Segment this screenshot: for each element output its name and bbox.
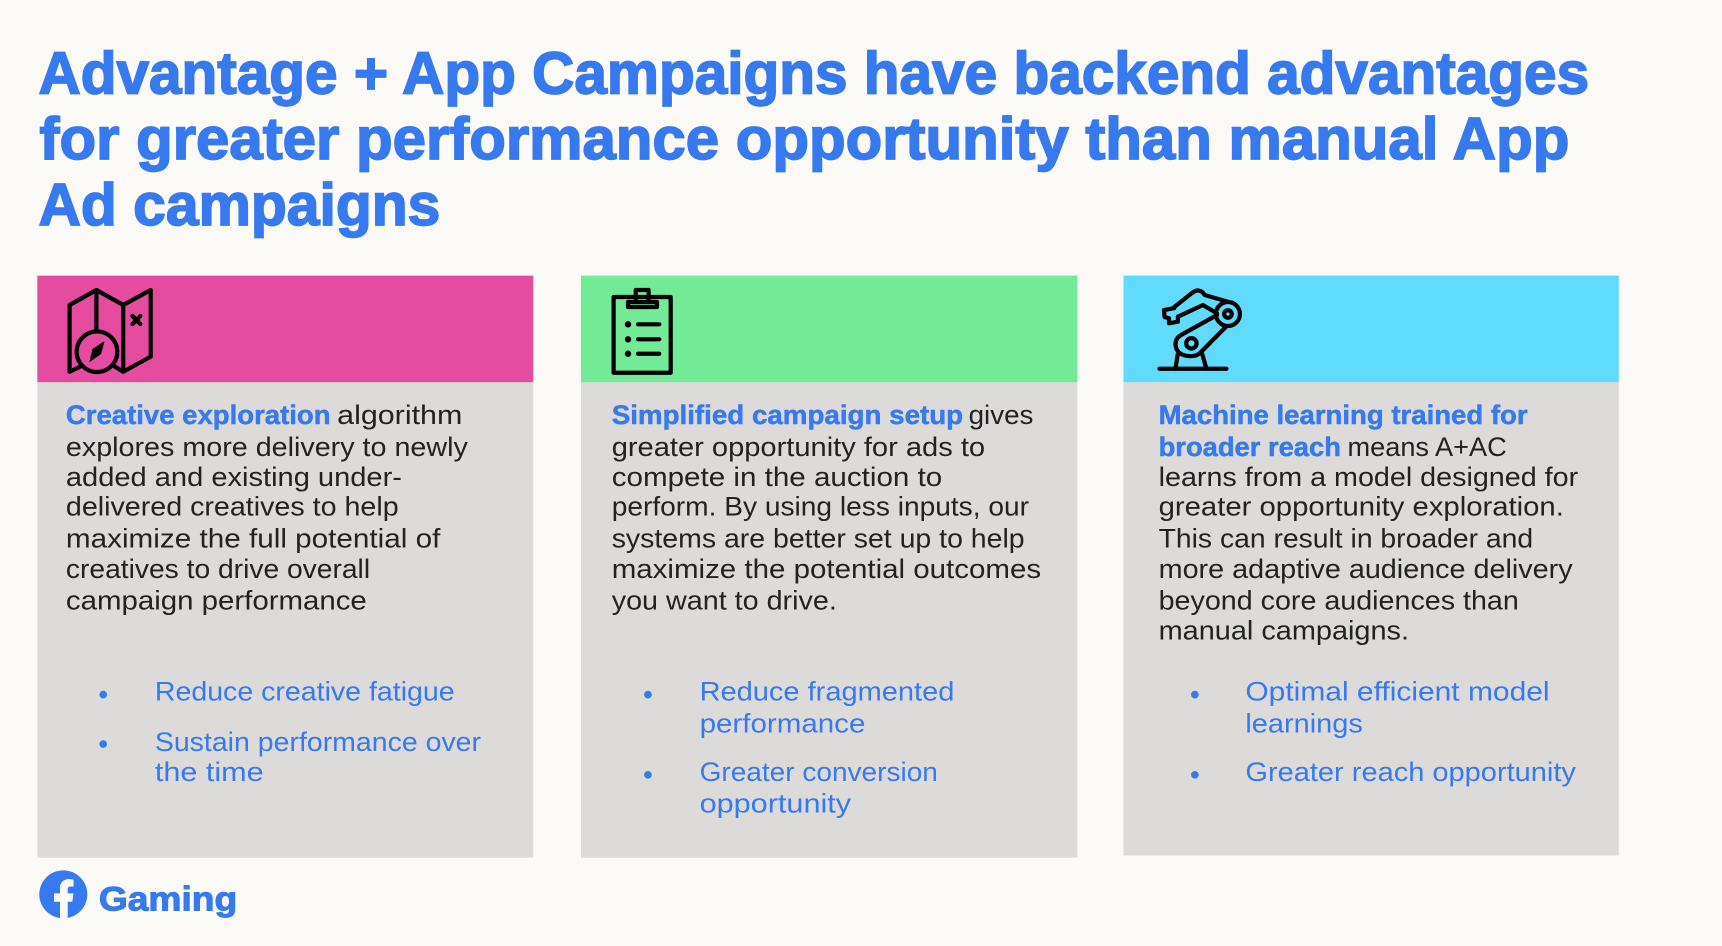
- icon: folded map with compass: [70, 290, 151, 372]
- description text: means A+AC: [1348, 432, 1507, 462]
- description text: Simplified campaign setup: [612, 400, 963, 430]
- panel: machine learning: [1123, 276, 1619, 856]
- bullet list: Optimal efficient model: [1245, 677, 1550, 707]
- bullet list: performance: [700, 709, 865, 739]
- description text: you want to drive.: [612, 586, 837, 616]
- icon: robotic arm: [1160, 291, 1240, 369]
- logo: Facebook Gaming: [39, 870, 237, 919]
- description text: Machine learning trained for: [1159, 400, 1528, 430]
- description text: delivered creatives to help: [66, 492, 399, 522]
- description text: maximize the full potential of: [66, 523, 441, 553]
- description text: learns from a model designed for: [1159, 462, 1578, 492]
- panel: simplified campaign setup: [581, 276, 1077, 858]
- description text: This can result in broader and: [1159, 523, 1533, 553]
- title: Ad campaigns: [38, 171, 440, 238]
- header band: [1123, 276, 1619, 382]
- bullet list: [1191, 677, 1577, 787]
- description text: perform. By using less inputs, our: [612, 492, 1029, 522]
- bullet list: Reduce fragmented: [700, 677, 954, 707]
- description text: compete in the auction to: [612, 462, 942, 492]
- bullet list: the time: [155, 757, 264, 787]
- panel background: [1123, 276, 1619, 856]
- bullet list: [644, 677, 954, 819]
- description text: greater opportunity for ads to: [612, 432, 985, 462]
- description text: creatives to drive overall: [66, 554, 370, 584]
- description text: [612, 400, 1041, 616]
- description text: maximize the potential outcomes: [612, 554, 1041, 584]
- description text: campaign performance: [66, 586, 367, 616]
- bullet list: [99, 677, 481, 787]
- description text: beyond core audiences than: [1159, 586, 1519, 616]
- icon: Facebook f: [39, 870, 87, 919]
- bullet list: Reduce creative fatigue: [155, 677, 455, 707]
- bullet list: Greater reach opportunity: [1245, 757, 1577, 787]
- title: for greater performance opportunity than manual App: [40, 105, 1569, 172]
- title: [38, 39, 1589, 238]
- description text: greater opportunity exploration.: [1159, 492, 1564, 522]
- description text: added and existing under-: [66, 462, 402, 492]
- description text: manual campaigns.: [1159, 616, 1409, 646]
- title: Advantage + App Campaigns have backend advantages: [38, 39, 1589, 106]
- description text: systems are better set up to help: [612, 523, 1025, 553]
- bullet list: Sustain performance over: [155, 727, 481, 757]
- bullet list: learnings: [1245, 709, 1363, 739]
- panel background: [37, 276, 533, 858]
- bullet list: opportunity: [700, 789, 852, 819]
- panel: creative exploration: [37, 276, 533, 858]
- description text: algorithm: [337, 400, 462, 430]
- description text: broader reach: [1159, 432, 1341, 462]
- icon: clipboard checklist: [614, 290, 671, 373]
- wordmark: Gaming: [99, 880, 237, 918]
- bullet list: Greater conversion: [700, 757, 938, 787]
- description text: [66, 400, 468, 616]
- description text: [1159, 400, 1578, 646]
- header band: [37, 276, 533, 382]
- description text: explores more delivery to newly: [66, 432, 468, 462]
- description text: Creative exploration: [66, 400, 331, 430]
- header band: [581, 276, 1077, 382]
- panel background: [581, 276, 1077, 858]
- description text: gives: [969, 400, 1033, 430]
- description text: more adaptive audience delivery: [1159, 554, 1573, 584]
